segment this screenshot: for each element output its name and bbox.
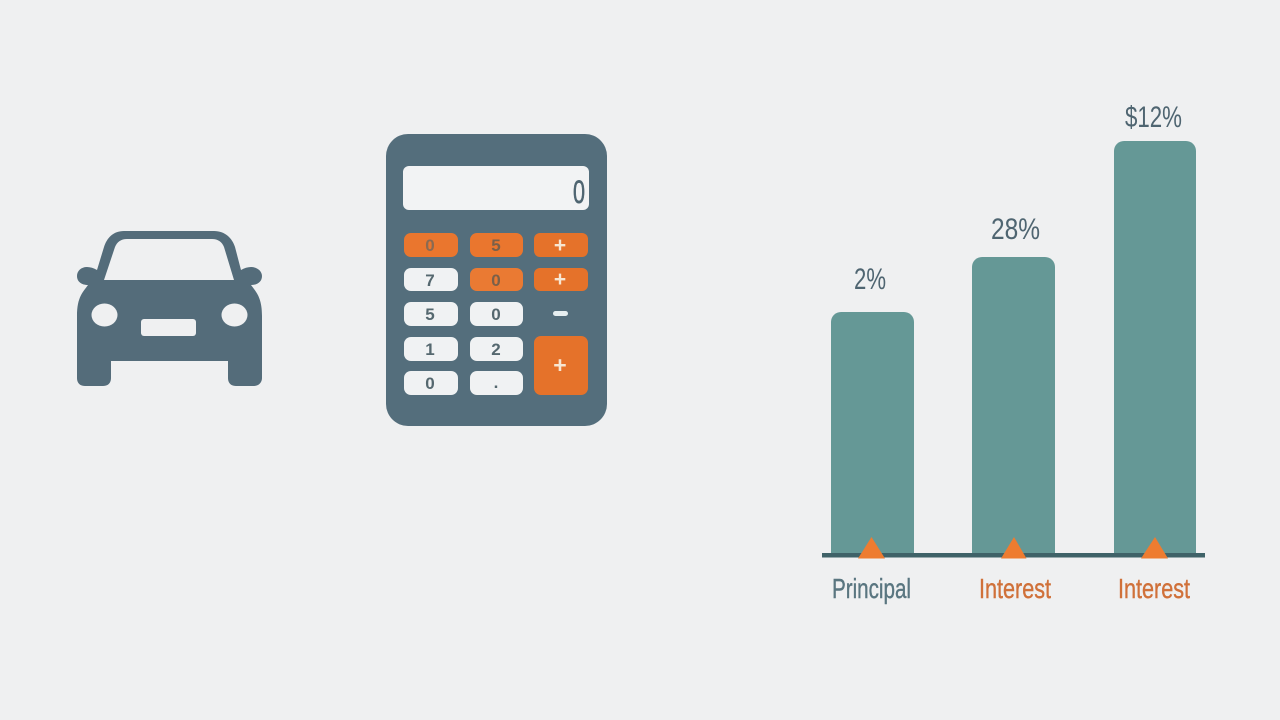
- calculator keys: +: [554, 234, 566, 257]
- value label 3: $12%: [1125, 101, 1182, 134]
- calculator body: [386, 134, 607, 426]
- marker triangle 2: [1001, 537, 1026, 558]
- calculator keys: 5: [425, 305, 435, 324]
- category label: interest 1: Interest: [979, 573, 1051, 604]
- calculator keys: 0: [425, 236, 435, 255]
- marker triangle 1: [858, 537, 885, 558]
- calculator display: 0: [573, 174, 585, 210]
- car headlight right: [222, 304, 248, 326]
- calculator keys: 2: [491, 340, 501, 359]
- bar: second interest: [1114, 141, 1196, 555]
- calculator keys: .: [494, 373, 498, 392]
- calculator keys: +: [553, 352, 567, 378]
- icon: car front view: [77, 231, 262, 386]
- category label: principal: Principal: [832, 573, 911, 604]
- marker triangle 3: [1141, 537, 1168, 558]
- bar chart: [822, 101, 1205, 604]
- calculator keys: 7: [425, 271, 435, 290]
- value label 1: 2%: [854, 263, 886, 296]
- chart baseline: [822, 553, 1205, 558]
- bar: first interest: [972, 257, 1055, 555]
- calculator keys: 5: [491, 236, 501, 255]
- calculator display: [403, 166, 589, 210]
- calculator keys: 0: [425, 374, 435, 393]
- calculator keys: 0: [491, 271, 501, 290]
- category label: interest 2: Interest: [1118, 573, 1190, 604]
- car grille: [141, 319, 196, 336]
- calculator keys: +: [554, 268, 566, 291]
- value label 2: 28%: [991, 213, 1040, 246]
- calculator keys: 1: [425, 340, 435, 359]
- icon: calculator: [386, 134, 607, 426]
- bar: principal: [831, 312, 914, 555]
- calculator keys: 0: [491, 305, 501, 324]
- calculator keys: [404, 233, 588, 395]
- car headlight left: [92, 304, 118, 326]
